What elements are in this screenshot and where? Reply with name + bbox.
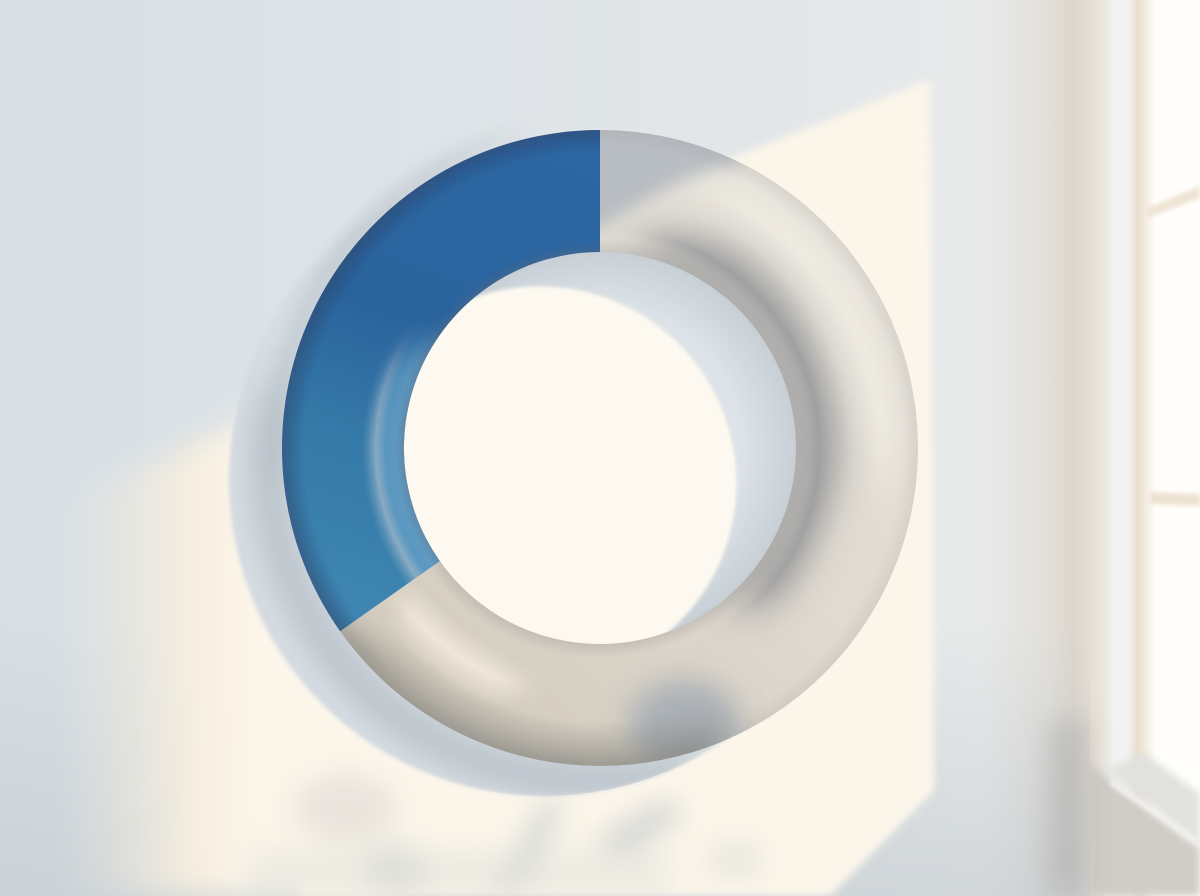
tube shading overlay — [434, 131, 918, 732]
shaded area inside the hole — [344, 248, 800, 679]
sunlit disc inside the hole — [344, 287, 736, 679]
outer shade lower left — [340, 618, 724, 766]
shaded wedge at top of neutral segment — [600, 130, 743, 234]
window at right — [1046, 186, 1200, 896]
window sill — [1088, 760, 1200, 896]
donut chart ring — [282, 100, 918, 772]
sunlight patch lower left — [60, 300, 400, 896]
window bottom reveal — [1107, 752, 1200, 846]
window pane muntin lower — [1150, 492, 1200, 506]
foliage shadow at bottom — [250, 774, 765, 896]
soft halo upper left of ring — [274, 140, 492, 418]
inner right shadow on ring — [624, 214, 862, 629]
highlight lower left tube — [396, 594, 526, 697]
light inner band on blue tube — [364, 332, 440, 584]
highlight on right tube — [732, 196, 892, 461]
sunlight patch right — [300, 80, 934, 896]
segment: neutral remainder — [340, 130, 918, 766]
wall darkening toward the floor — [0, 620, 1090, 896]
window pane muntin upper — [1147, 186, 1200, 218]
tube shading overlay — [282, 130, 600, 632]
bottom blue-grey shadow patch — [629, 680, 741, 772]
segment: blue share — [282, 130, 600, 632]
contact shadow lower left of ring — [244, 384, 699, 796]
corner wall shade — [1046, 720, 1086, 896]
sill highlight strip — [1110, 778, 1200, 847]
cast shadow of donut — [229, 164, 861, 796]
